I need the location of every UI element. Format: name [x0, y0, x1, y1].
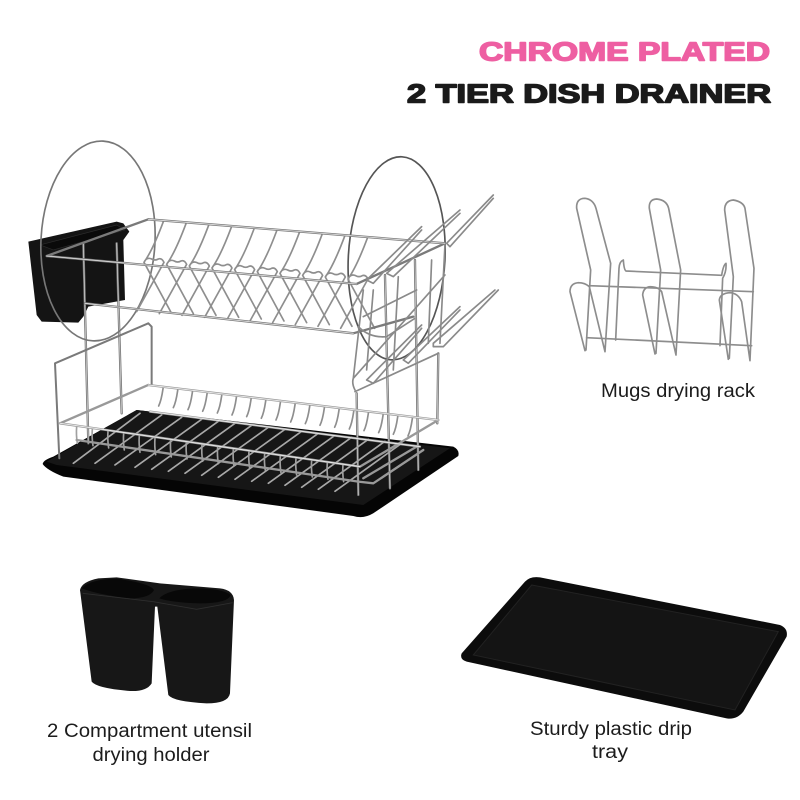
black drip tray	[43, 410, 459, 517]
drip tray product	[461, 577, 787, 719]
captions	[47, 381, 756, 766]
lower tier cross wires	[73, 413, 402, 491]
mug hook 3	[719, 200, 754, 361]
title line: chrome plated: CHROME PLATED	[479, 38, 770, 66]
cross wires	[587, 260, 753, 346]
tray inner edge	[473, 585, 778, 710]
holder openings	[82, 579, 231, 603]
caption: mugs drying rack: Mugs drying rack	[601, 381, 756, 402]
utensil holder	[28, 222, 129, 323]
lower tier tines	[159, 387, 413, 436]
holder body	[80, 577, 234, 703]
right hoop	[343, 154, 450, 362]
right side forks and frame	[353, 195, 498, 392]
post highlights	[83, 243, 438, 495]
lower tier rails	[60, 385, 438, 483]
lower tier rail highlights	[60, 385, 438, 467]
support posts	[83, 243, 438, 495]
holder rim	[40, 225, 125, 250]
lower tier front tines	[76, 427, 344, 482]
upper tier tines	[137, 222, 375, 328]
utensil holder product	[80, 577, 234, 703]
upper tier rails	[47, 219, 445, 333]
caption: utensil holder	[47, 721, 252, 766]
caption: drip tray: tray	[592, 742, 629, 763]
title	[407, 38, 771, 108]
mug hook 1	[570, 198, 611, 352]
caption: utensil holder: 2 Compartment utensil	[47, 721, 252, 742]
caption: drip tray	[530, 719, 692, 763]
main product: dish rack	[28, 138, 498, 517]
caption: utensil holder: drying holder	[92, 745, 210, 766]
holder rim highlight	[83, 593, 233, 609]
mug hook 2	[643, 199, 681, 355]
title line: 2 tier dish drainer: 2 TIER DISH DRAINER	[407, 80, 771, 108]
lower left frame	[55, 323, 152, 458]
caption: drip tray: Sturdy plastic drip	[530, 719, 692, 740]
tray outer	[461, 577, 787, 719]
mugs drying rack	[570, 198, 754, 361]
left hoop	[36, 138, 160, 344]
upper tier rail highlights	[47, 219, 445, 333]
